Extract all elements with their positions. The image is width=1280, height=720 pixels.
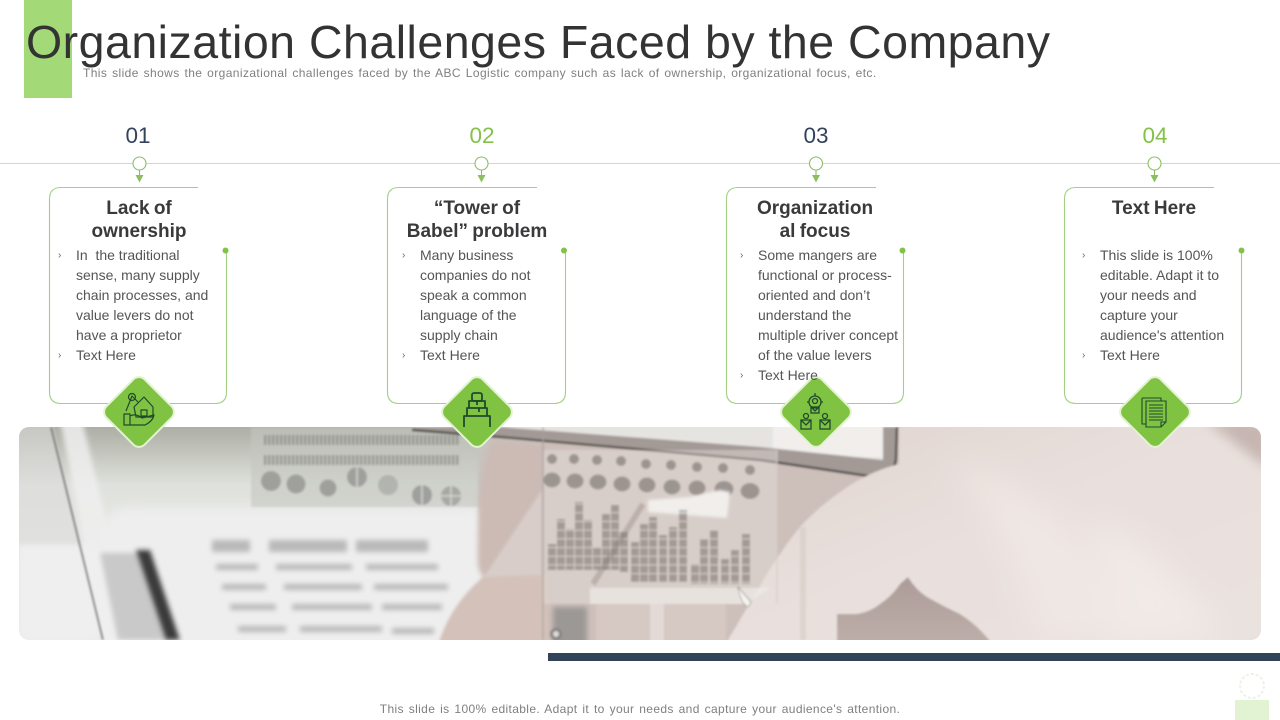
timeline line bbox=[0, 163, 1280, 164]
card 2 bullet list: supply chain bbox=[420, 327, 498, 343]
card 3 bullet list: Text Here bbox=[758, 367, 818, 383]
droplets and circles bbox=[544, 454, 760, 499]
bright bar pattern bbox=[648, 490, 730, 518]
marker 4 bbox=[1148, 157, 1161, 182]
subtitle: This slide shows the organizational challenges faced by the ABC Logistic company such as lack of ownership, organizational focus, etc. bbox=[83, 66, 877, 80]
icon: organization focus people bbox=[778, 374, 854, 450]
card 1 heading: ownership bbox=[91, 221, 186, 242]
palm and fingers bbox=[725, 420, 1270, 645]
card 4 bullet list: your needs and bbox=[1100, 287, 1197, 303]
number 03: 03 bbox=[803, 123, 829, 148]
card 4 bullet list: Text Here bbox=[1100, 347, 1160, 363]
marker 3 bbox=[810, 157, 822, 182]
icon: tower of babel bbox=[439, 374, 515, 450]
bar chart tiles bbox=[548, 502, 750, 584]
card 2 bullet list: Text Here bbox=[420, 347, 480, 363]
card 3 bullet list: understand the bbox=[758, 307, 851, 323]
keyboard keys bbox=[212, 540, 448, 634]
card 3 bullet list bbox=[740, 247, 898, 383]
card 3 bullet list: oriented and don’t bbox=[758, 287, 870, 303]
card 2 bullet list: speak a common bbox=[420, 287, 527, 303]
laptop body bbox=[110, 508, 484, 582]
tablet bbox=[412, 427, 898, 461]
fingers left bbox=[478, 440, 545, 578]
card 3 bullet list: of the value levers bbox=[758, 347, 872, 363]
diagonal finger edge bbox=[593, 504, 643, 584]
icon: documents bbox=[1117, 374, 1193, 450]
card 1 bullet list: Text Here bbox=[76, 347, 136, 363]
navy footer bar bbox=[548, 653, 1280, 661]
card 2 heading: Babel” problem bbox=[407, 221, 547, 242]
footer note: This slide is 100% editable. Adapt it to your needs and capture your audience's attention. bbox=[380, 702, 900, 716]
background bbox=[19, 427, 478, 640]
icon: hand holding house and key bbox=[101, 374, 177, 450]
card 2 outline bbox=[388, 188, 567, 404]
cursor bbox=[738, 587, 751, 607]
card 3 bullet list: multiple driver concept bbox=[758, 327, 898, 343]
card 4 bullet list: audience's attention bbox=[1100, 327, 1224, 343]
card 1 heading bbox=[91, 198, 186, 242]
card 1 bullet list: In the traditional bbox=[76, 247, 180, 263]
card 2 heading bbox=[407, 198, 547, 242]
card 1 bullet list: value levers do not bbox=[76, 307, 194, 323]
photo: hands on laptop with data overlay bbox=[19, 427, 1261, 640]
marker 1 bbox=[133, 157, 146, 182]
card 1 bullet list: chain processes, and bbox=[76, 287, 208, 303]
data overlay panel bbox=[543, 450, 777, 604]
card 3 heading bbox=[757, 198, 873, 242]
card 1 heading: Lack of bbox=[106, 198, 172, 219]
title accent block bbox=[24, 0, 72, 98]
card 2 bullet list: Many business bbox=[420, 247, 513, 263]
card 4 bullet list: editable. Adapt it to bbox=[1100, 267, 1219, 283]
card 2 bullet list: language of the bbox=[420, 307, 517, 323]
card 3 heading: al focus bbox=[780, 221, 850, 242]
card 2 bullet list bbox=[402, 247, 531, 363]
card 3 bullet list: functional or process- bbox=[758, 267, 892, 283]
card 4 bullet list bbox=[1082, 247, 1224, 363]
number 04: 04 bbox=[1142, 123, 1168, 148]
card 1 bullet list bbox=[58, 247, 208, 363]
people rows bbox=[264, 440, 460, 460]
card 4 bullet list: capture your bbox=[1100, 307, 1178, 323]
number 02: 02 bbox=[469, 123, 495, 148]
card 3 heading: Organization bbox=[757, 198, 873, 219]
play button bbox=[550, 628, 562, 640]
card 2 heading: “Tower of bbox=[434, 198, 520, 219]
transparent panel bbox=[250, 427, 478, 508]
card 4 bullet list: This slide is 100% bbox=[1100, 247, 1213, 263]
number 01: 01 bbox=[125, 123, 151, 148]
marker 2 bbox=[475, 157, 488, 182]
pie charts bbox=[261, 467, 461, 506]
title: Organization Challenges Faced by the Company bbox=[26, 16, 1050, 68]
card 4 outline bbox=[1064, 188, 1244, 404]
card 4 heading: Text Here bbox=[1112, 198, 1196, 219]
lower panel band bbox=[590, 588, 770, 604]
card 3 outline bbox=[726, 188, 906, 404]
laptop screen edge bbox=[19, 427, 59, 468]
card 1 outline bbox=[50, 188, 228, 404]
card 2 bullet list: companies do not bbox=[420, 267, 531, 283]
card 1 bullet list: have a proprietor bbox=[76, 327, 182, 343]
card 3 bullet list: Some mangers are bbox=[758, 247, 877, 263]
card 1 bullet list: sense, many supply bbox=[76, 267, 200, 283]
